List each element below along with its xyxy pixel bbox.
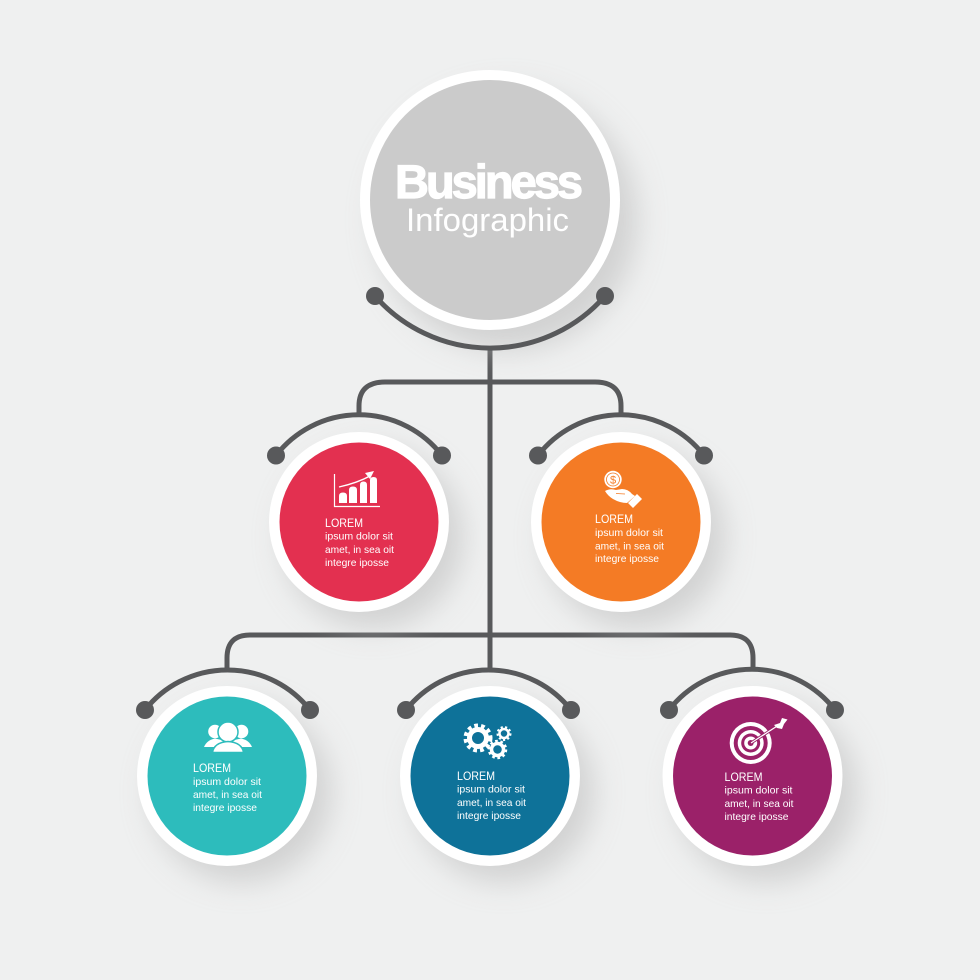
text block: ipsum dolor sit xyxy=(595,527,663,539)
title: Business: Business xyxy=(395,155,583,208)
icon: bar chart xyxy=(334,471,380,506)
text block: amet, in sea oit xyxy=(325,544,394,556)
bracket xyxy=(397,670,580,719)
text block xyxy=(724,770,794,823)
text block: amet, in sea oit xyxy=(457,797,526,809)
text block: ipsum dolor sit xyxy=(193,776,261,788)
text block: LOREM xyxy=(724,770,762,784)
bracket xyxy=(529,415,713,464)
panel: red xyxy=(267,415,463,628)
text block: amet, in sea oit xyxy=(595,540,664,552)
connector lines xyxy=(227,348,753,668)
icon: people xyxy=(204,722,252,752)
icon: hand with coin: $ xyxy=(610,474,616,486)
text block: LOREM xyxy=(595,512,633,526)
panel: teal xyxy=(136,670,331,882)
text block: ipsum dolor sit xyxy=(724,784,793,796)
bracket xyxy=(267,415,451,464)
main circle bracket xyxy=(366,287,614,348)
panel: blue xyxy=(397,670,594,882)
panel: orange xyxy=(529,415,725,628)
text block xyxy=(325,516,394,569)
text block xyxy=(595,512,664,565)
bracket xyxy=(136,670,319,719)
icon: gears xyxy=(466,726,510,758)
text block: LOREM xyxy=(193,761,231,775)
text block: amet, in sea oit xyxy=(193,789,262,801)
panel: main circle xyxy=(360,70,637,350)
text block: integre iposse xyxy=(724,811,789,823)
icon: hand with coin xyxy=(604,471,642,508)
text block: LOREM xyxy=(457,769,495,783)
icon: target with arrow xyxy=(730,718,788,764)
text block: LOREM xyxy=(325,516,363,530)
text block: integre iposse xyxy=(193,802,257,814)
panel: purple xyxy=(660,669,857,882)
bracket xyxy=(660,669,844,719)
text block: integre iposse xyxy=(457,810,521,822)
text block: ipsum dolor sit xyxy=(457,784,525,796)
text block: ipsum dolor sit xyxy=(325,530,393,542)
text block: integre iposse xyxy=(325,557,389,569)
text block xyxy=(193,761,262,814)
text block xyxy=(457,769,526,822)
text block: integre iposse xyxy=(595,553,659,565)
text block: amet, in sea oit xyxy=(724,798,794,810)
subtitle: Infographic: Infographic xyxy=(406,202,569,238)
